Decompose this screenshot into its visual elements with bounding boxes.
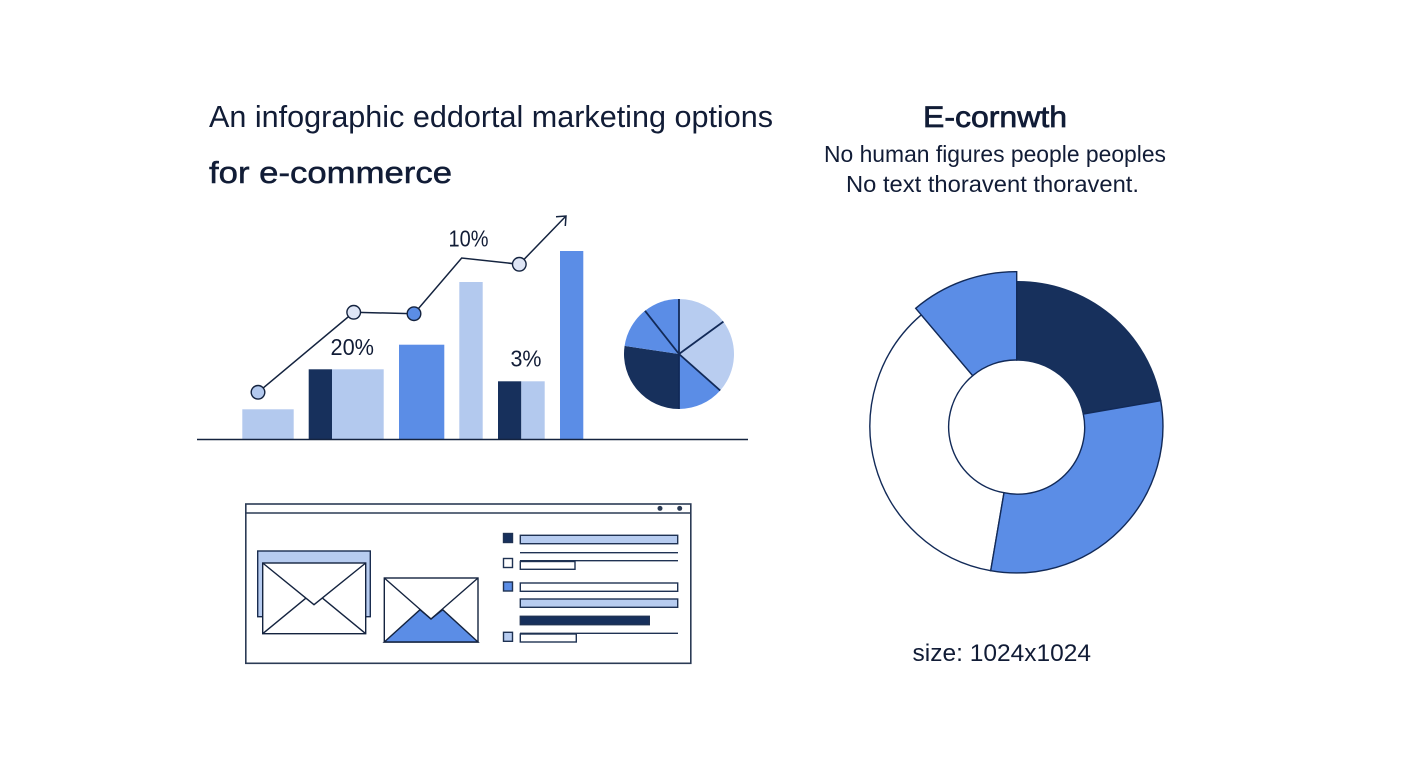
chart axis	[197, 438, 748, 440]
percentage labels: 10%	[448, 226, 489, 252]
size caption: size: 1024x1024	[912, 640, 1091, 667]
donut segment: blue large	[991, 401, 1163, 573]
subtitle text: No human figures people peoples	[824, 141, 1166, 167]
trend line markers	[251, 258, 526, 399]
donut segment: blue raised	[916, 272, 1017, 376]
browser window panel	[246, 504, 691, 663]
percentage labels: 3%	[510, 346, 542, 372]
small pie chart	[624, 299, 734, 409]
window frame	[246, 504, 691, 663]
list rows	[504, 534, 678, 642]
percentage labels	[330, 226, 542, 372]
donut chart	[870, 272, 1163, 573]
bars	[242, 251, 583, 439]
right heading: E-cornwth	[923, 101, 1067, 134]
icon: back envelope card	[258, 551, 370, 617]
percentage labels: 20%	[330, 334, 374, 360]
icon: envelope with blue flap	[384, 578, 478, 642]
title: for e-commerce	[209, 155, 452, 190]
trend line with arrow	[258, 216, 566, 392]
donut segment: white	[870, 315, 1004, 571]
title: An infographic eddortal marketing options	[209, 99, 773, 134]
window dots	[658, 506, 682, 511]
title	[209, 99, 773, 190]
bar and line chart	[197, 216, 748, 440]
subtitle text: No text thoravent thoravent.	[846, 171, 1139, 197]
donut segment: dark	[1017, 282, 1161, 414]
subtitle text	[824, 141, 1166, 197]
icon: envelope	[263, 563, 366, 634]
